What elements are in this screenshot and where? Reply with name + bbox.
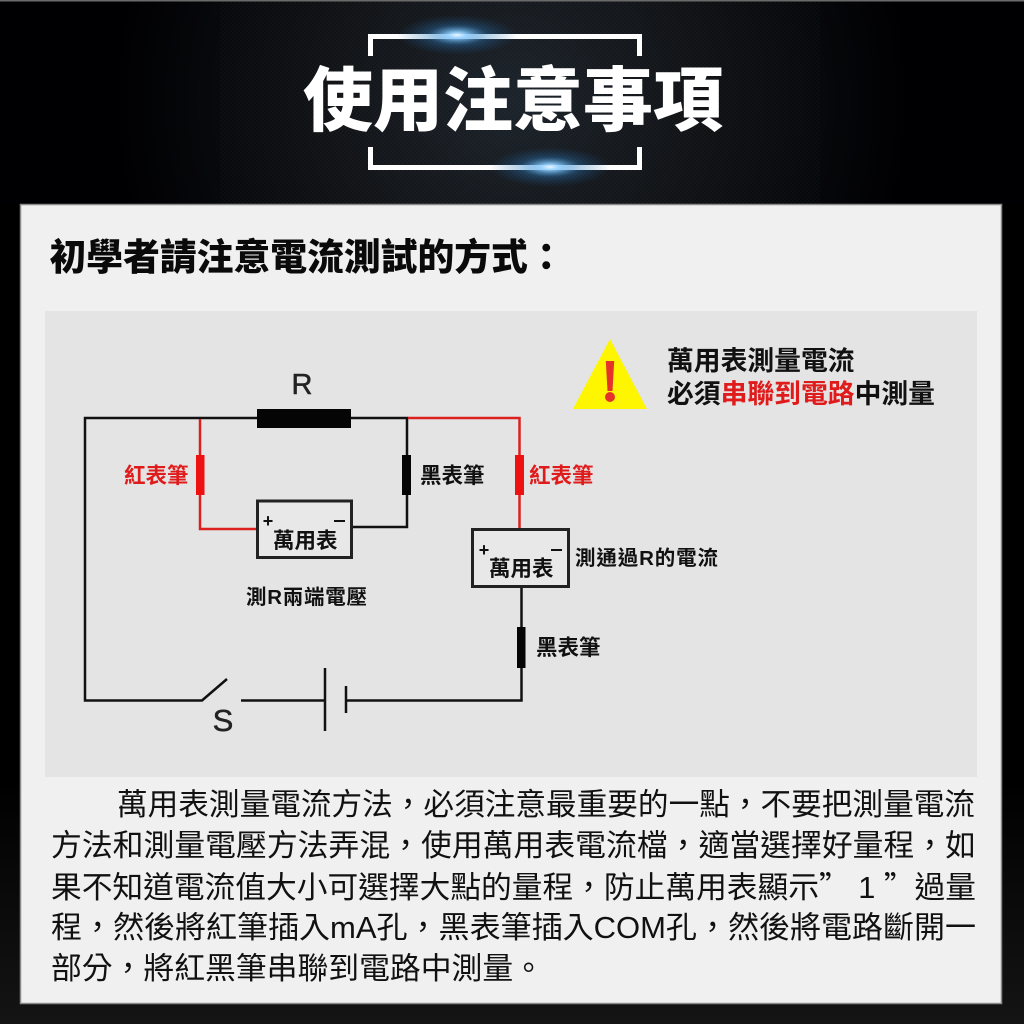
title text: 使用注意事項 — [303, 45, 723, 146]
red probe right: 紅表筆 — [529, 463, 594, 488]
body paragraph: 方法和測量電壓方法弄混，使用萬用表電流檔，適當選擇好量程，如 — [51, 821, 976, 865]
body paragraph: 萬用表測量電流方法，必須注意最重要的一點，不要把測量電流 — [117, 780, 975, 824]
resistor R: R — [292, 369, 312, 401]
title frame with light flares — [370, 15, 640, 187]
red probe left — [124, 455, 204, 495]
multimeter left: 萬用表 — [273, 529, 338, 553]
multimeter right: + — [479, 540, 489, 560]
title banner — [303, 15, 723, 187]
multimeter left: + — [263, 511, 273, 531]
main circuit wiring — [85, 418, 522, 731]
resistor R — [257, 369, 351, 428]
black probe middle: 黑表筆 — [420, 463, 485, 488]
content panel — [20, 204, 1002, 1004]
black probe bottom: 黑表筆 — [536, 635, 601, 660]
multimeter right — [472, 530, 568, 586]
warning text: 必須串聯到電路中測量 — [667, 379, 935, 409]
warning text — [667, 346, 935, 409]
switch label: S — [213, 703, 233, 738]
multimeter left — [258, 501, 352, 558]
red probe right — [515, 455, 594, 495]
body paragraph — [51, 780, 976, 988]
warning icon — [573, 339, 647, 409]
warning text: 萬用表測量電流 — [667, 346, 855, 376]
heading: 初學者請注意電流測試的方式： — [50, 227, 565, 281]
body paragraph: 程，然後將紅筆插入mA孔，黑表筆插入COM孔，然後將電路斷開一 — [51, 903, 976, 947]
label: current measurement: 測通過R的電流 — [575, 547, 718, 570]
black probe middle — [402, 455, 485, 495]
multimeter right: 萬用表 — [489, 557, 554, 581]
red probe wires — [200, 418, 520, 529]
label: voltage measurement: 測R兩端電壓 — [246, 586, 367, 609]
circuit diagram panel — [45, 311, 977, 777]
body paragraph: 部分，將紅黑筆串聯到電路中測量。 — [51, 944, 544, 988]
red probe left: 紅表筆 — [124, 463, 189, 488]
body paragraph: 果不知道電流值大小可選擇大點的量程，防止萬用表顯示” 1 ”過量 — [51, 863, 976, 907]
black probe bottom — [517, 627, 601, 668]
